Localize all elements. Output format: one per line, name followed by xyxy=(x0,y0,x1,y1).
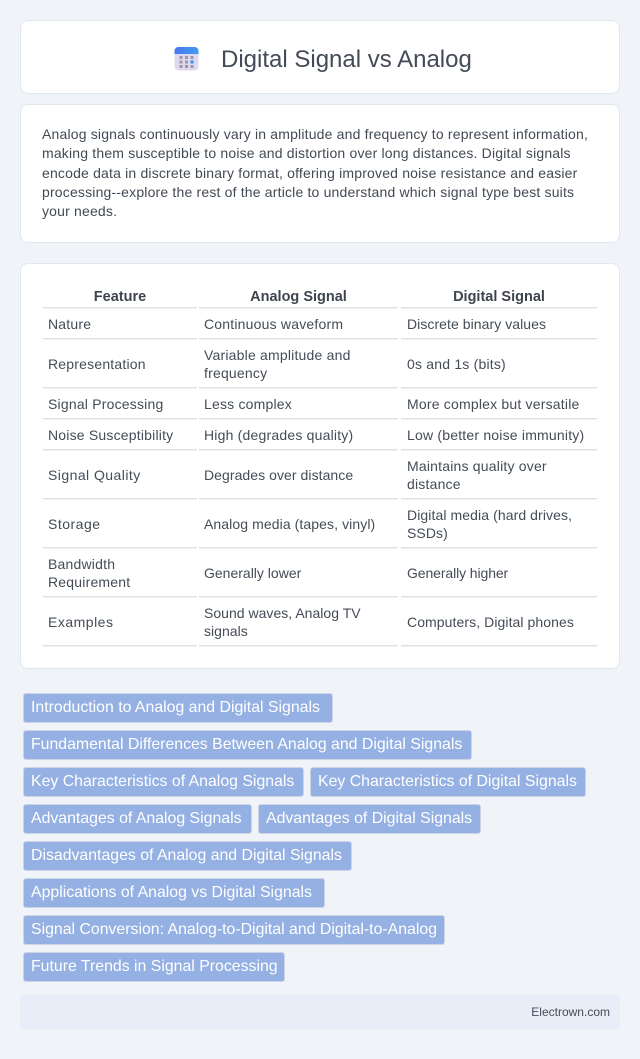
tag: analog advantages: Advantages of Analog Signals xyxy=(31,810,242,827)
row: Representation: frequency xyxy=(204,365,267,381)
row: Signal Processing: Signal Processing xyxy=(48,396,163,412)
tag: disadvantages: Disadvantages of Analog and Digital Signals xyxy=(31,847,342,864)
intro text: making them susceptible to noise and distortion over long distances. Digital signals xyxy=(42,145,571,161)
tag: fundamental differences xyxy=(23,730,472,760)
row: Nature: Nature xyxy=(48,316,91,332)
row: Signal Processing: More complex but versatile xyxy=(407,396,580,412)
title: Digital Signal vs Analog xyxy=(221,46,472,73)
row: Bandwidth Requirement xyxy=(48,556,508,590)
tag: signal conversion xyxy=(23,915,445,945)
tag: analog characteristics xyxy=(23,767,304,797)
row: Storage xyxy=(48,507,572,541)
row: Examples: signals xyxy=(204,623,248,639)
footer bar xyxy=(20,995,620,1029)
row: Storage: Analog media (tapes, vinyl) xyxy=(204,516,375,532)
row: Bandwidth Requirement: Generally higher xyxy=(407,565,508,581)
intro text: encode data in discrete binary format, offering improved noise resistance and easier xyxy=(42,165,578,181)
intro text xyxy=(42,126,588,219)
row: Bandwidth Requirement: Requirement xyxy=(48,574,130,590)
row: Examples: Examples xyxy=(48,614,113,630)
row: Noise Susceptibility: Noise Susceptibility xyxy=(48,427,173,443)
row: Storage: Digital media (hard drives, xyxy=(407,507,572,523)
icon: calendar grid xyxy=(174,47,198,70)
intro text: Analog signals continuously vary in amplitude and frequency to represent information, xyxy=(42,126,588,142)
tag: introduction xyxy=(23,693,333,723)
intro text: processing--explore the rest of the article to understand which signal type best suits xyxy=(42,184,574,200)
tag: applications: Applications of Analog vs Digital Signals xyxy=(31,884,312,901)
row: Representation: 0s and 1s (bits) xyxy=(407,356,506,372)
row: Bandwidth Requirement: Generally lower xyxy=(204,565,301,581)
intro paragraph card xyxy=(20,104,620,243)
tag: applications xyxy=(23,878,325,908)
tag: digital advantages: Advantages of Digital Signals xyxy=(266,810,472,827)
row: Nature: Discrete binary values xyxy=(407,316,546,332)
intro text: your needs. xyxy=(42,203,117,219)
row: Nature xyxy=(48,316,546,332)
row: Bandwidth Requirement: Bandwidth xyxy=(48,556,115,572)
row: Signal Quality xyxy=(48,458,547,492)
row: Signal Quality: Maintains quality over xyxy=(407,458,547,474)
row: Representation: Variable amplitude and xyxy=(204,347,351,363)
topic tags xyxy=(23,693,586,982)
tag: fundamental differences: Fundamental Differences Between Analog and Digital Signals xyxy=(31,736,462,753)
row: Signal Quality: Degrades over distance xyxy=(204,467,353,483)
row: Storage: Storage xyxy=(48,516,101,532)
tag: disadvantages xyxy=(23,841,352,871)
row: Noise Susceptibility: Low (better noise immunity) xyxy=(407,427,584,443)
comparison table xyxy=(43,289,597,647)
header card xyxy=(20,20,620,94)
row: Signal Processing xyxy=(48,396,580,412)
row: Signal Quality: distance xyxy=(407,476,461,492)
tag: future trends: Future Trends in Signal Processing xyxy=(31,958,278,975)
tag: digital characteristics: Key Characteristics of Digital Signals xyxy=(318,773,577,790)
tag: analog characteristics: Key Characteristics of Analog Signals xyxy=(31,773,294,790)
row: Signal Processing: Less complex xyxy=(204,396,292,412)
row: Signal Quality: Signal Quality xyxy=(48,467,141,483)
comparison table card xyxy=(20,263,620,669)
tag: digital advantages xyxy=(258,804,481,834)
tag: analog advantages xyxy=(23,804,252,834)
row: Examples xyxy=(48,605,574,639)
table header: Feature: Feature xyxy=(94,289,146,305)
table header: Analog Signal: Analog Signal xyxy=(250,289,347,305)
footer credit: Electrown.com xyxy=(531,1005,610,1019)
tag: future trends xyxy=(23,952,285,982)
row: Storage: SSDs) xyxy=(407,525,448,541)
table header: Digital Signal: Digital Signal xyxy=(453,289,545,305)
row: Noise Susceptibility: High (degrades quality) xyxy=(204,427,353,443)
row: Examples: Computers, Digital phones xyxy=(407,614,574,630)
row: Noise Susceptibility xyxy=(48,427,584,443)
row: Examples: Sound waves, Analog TV xyxy=(204,605,361,621)
row: Nature: Continuous waveform xyxy=(204,316,343,332)
row: Representation: Representation xyxy=(48,356,146,372)
tag: digital characteristics xyxy=(310,767,586,797)
tag: signal conversion: Signal Conversion: Analog-to-Digital and Digital-to-Analog xyxy=(31,921,437,938)
tag: introduction: Introduction to Analog and Digital Signals xyxy=(31,699,320,716)
row: Representation xyxy=(48,347,506,381)
